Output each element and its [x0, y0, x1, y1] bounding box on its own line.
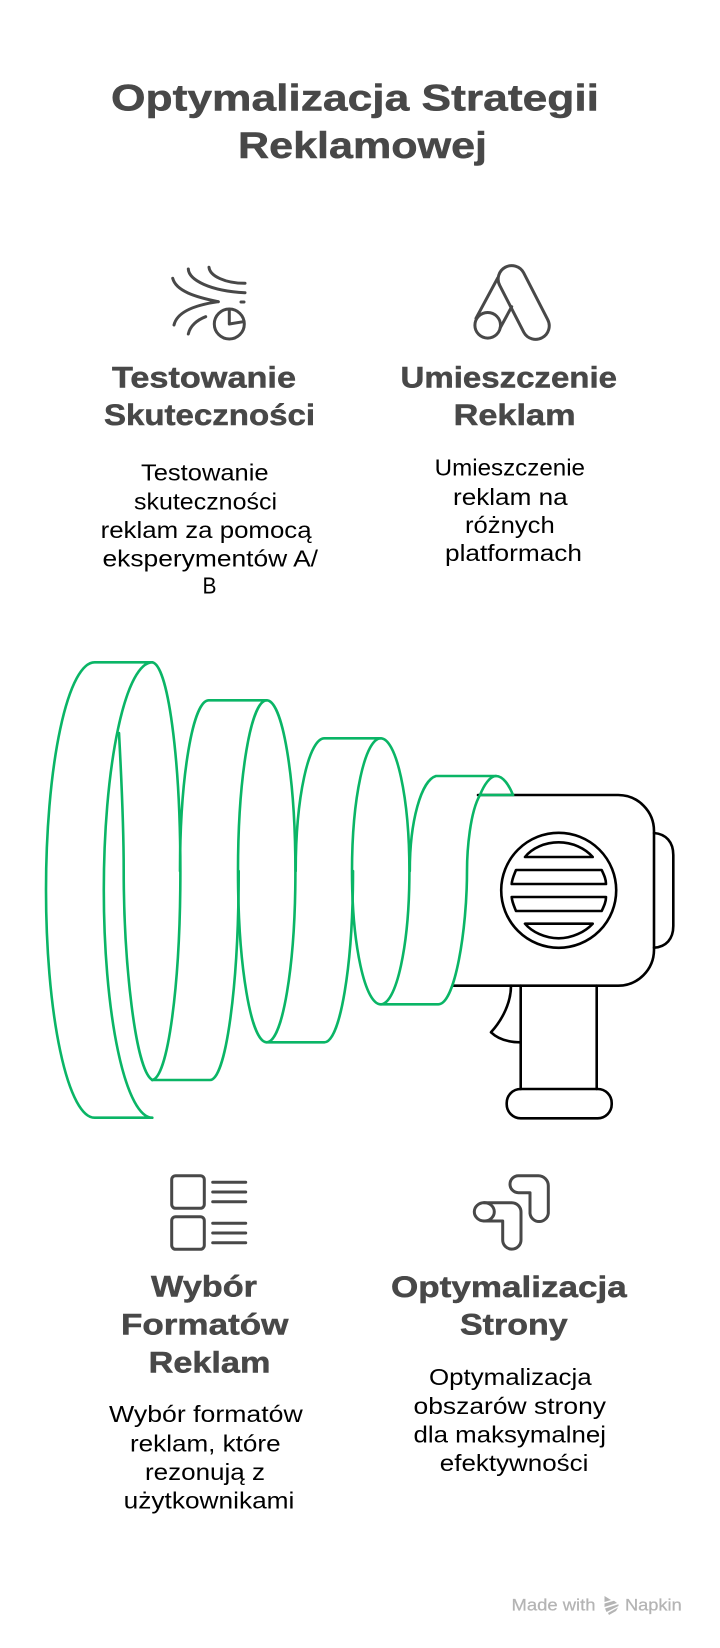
description: różnych [465, 512, 555, 538]
panel: wybór formatów reklam [109, 1176, 303, 1514]
heading: Umieszczenie [400, 362, 617, 394]
heading: Wybór [151, 1270, 257, 1304]
heading: Strony [460, 1308, 568, 1342]
title [111, 78, 599, 166]
footer: made with napkin: Made with [512, 1596, 596, 1615]
description: Optymalizacja [429, 1364, 592, 1390]
description [101, 460, 319, 598]
description: Wybór formatów [109, 1401, 303, 1427]
title: Reklamowej [238, 125, 487, 166]
heading: Skuteczności [104, 399, 315, 432]
title: Optymalizacja Strategii [111, 78, 599, 118]
description: Umieszczenie [435, 454, 585, 480]
heading: Reklam [149, 1346, 270, 1380]
green coils [46, 662, 513, 1118]
description: B [202, 572, 216, 598]
description: Testowanie [141, 460, 269, 486]
footer: made with napkin: Napkin [625, 1596, 682, 1615]
description: efektywności [440, 1450, 588, 1476]
description: eksperymentów A/ [102, 546, 319, 572]
icon: list of items [172, 1176, 246, 1249]
heading: Formatów [121, 1308, 289, 1341]
icon: napkin logo [604, 1596, 618, 1615]
description: skuteczności [134, 488, 277, 514]
description: rezonują z [145, 1459, 265, 1485]
description [414, 1364, 607, 1476]
panel: optymalizacja strony [391, 1176, 627, 1476]
description: użytkownikami [124, 1488, 294, 1514]
description [435, 454, 585, 566]
description: reklam, które [130, 1430, 281, 1456]
description: reklam za pomocą [101, 517, 312, 543]
icon: airflow with pie chart [173, 267, 245, 339]
footer: made with napkin [512, 1596, 682, 1615]
heading: Testowanie [112, 362, 296, 394]
heading: Reklam [454, 399, 576, 432]
heading [400, 362, 617, 432]
description [109, 1401, 303, 1514]
megaphone body [453, 795, 673, 1118]
description: platformach [445, 540, 582, 566]
heading [121, 1270, 289, 1380]
panel: umieszczenie reklam [400, 266, 617, 566]
description: dla maksymalnej [414, 1422, 606, 1448]
panel: testowanie skuteczności [101, 267, 319, 598]
icon: analytics pipes [474, 1176, 548, 1249]
heading [104, 362, 315, 432]
heading [391, 1271, 627, 1342]
description: reklam na [453, 484, 568, 510]
description: obszarów strony [414, 1393, 607, 1419]
icon: ads logo [475, 266, 549, 339]
heading: Optymalizacja [391, 1271, 627, 1304]
illustration: megaphone with green sound coils [46, 662, 673, 1118]
